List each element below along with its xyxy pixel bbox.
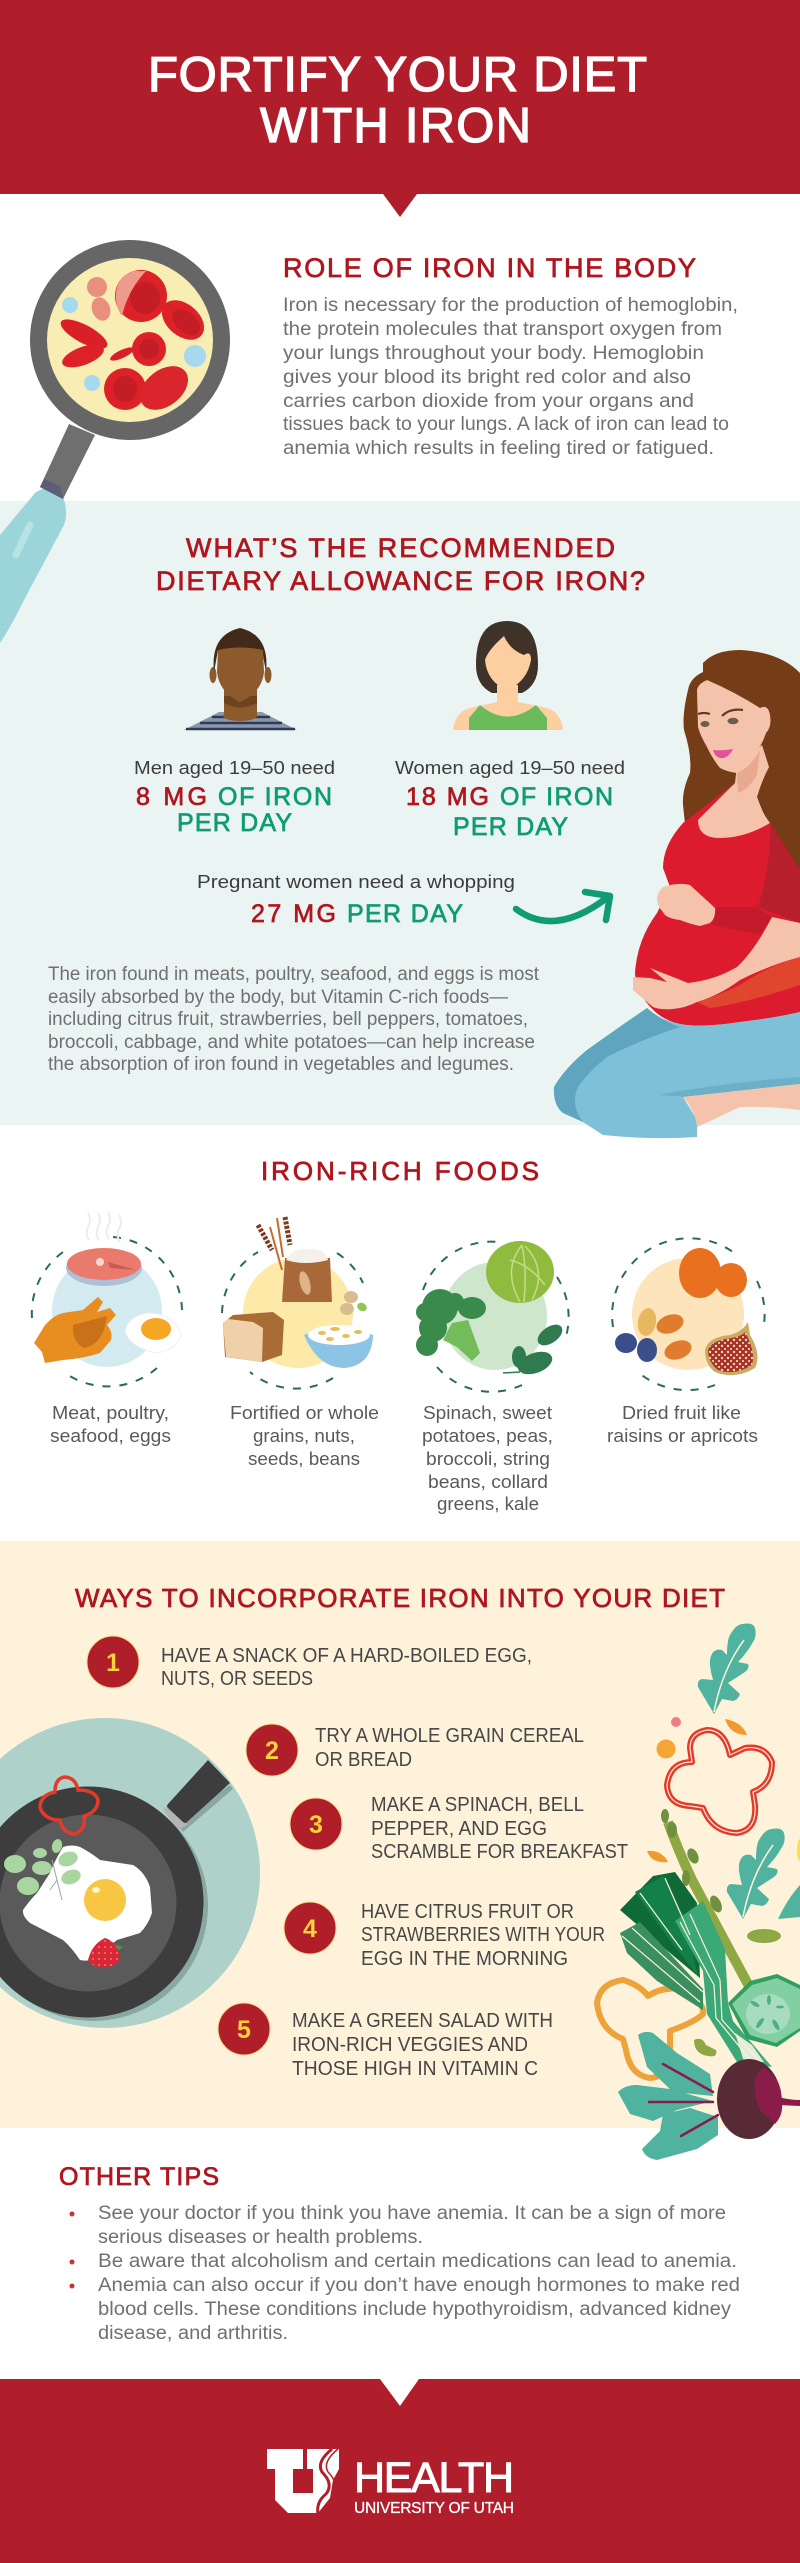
text block: absorption bbox=[48, 964, 540, 1075]
step 5: IRON-RICH VEGGIES AND bbox=[292, 2034, 528, 2056]
text block: men allowance: 8 MG bbox=[136, 783, 207, 811]
text block: men allowance: OF IRON bbox=[218, 783, 332, 811]
text block: role of iron: tissues back to your lungs. A lack of iron can lead to bbox=[283, 414, 729, 435]
red top bbox=[635, 783, 800, 1026]
chard stalks bbox=[620, 1872, 772, 2067]
panel: recommended allowance background bbox=[0, 501, 800, 1125]
icon: grains, nuts, seeds, beans bbox=[222, 1217, 373, 1389]
heading: recommended allowance: DIETARY ALLOWANCE FOR IRON? bbox=[156, 566, 645, 596]
step 3: PEPPER, AND EGG bbox=[371, 1818, 547, 1840]
text: grains label: Fortified or whole bbox=[230, 1402, 379, 1423]
step 4 bbox=[284, 1901, 605, 1970]
text: dried fruit label: Dried fruit like bbox=[622, 1402, 741, 1423]
step 4: 4 bbox=[303, 1915, 317, 1943]
text block: women allowance: 18 MG bbox=[406, 783, 489, 811]
blue cells bbox=[62, 297, 206, 391]
text block: pregnant women allowance bbox=[197, 871, 515, 928]
text: dried fruit label: raisins or apricots bbox=[607, 1425, 758, 1446]
step 1 bbox=[87, 1636, 532, 1690]
text: spinach label: greens, kale bbox=[437, 1493, 539, 1514]
title: FORTIFY YOUR DIET bbox=[148, 48, 647, 102]
text block: role of iron: anemia which results in feeling tired or fatigued. bbox=[283, 438, 714, 459]
list: other tips: Be aware that alcoholism and certain medications can lead to anemia. bbox=[98, 2251, 737, 2272]
yellow pepper bbox=[597, 1980, 703, 2078]
list: other tips: Anemia can also occur if you don’t have enough hormones to make red bbox=[98, 2275, 740, 2296]
text block: pregnant women allowance: 27 MG bbox=[251, 900, 336, 928]
text block: men allowance: Men aged 19–50 need bbox=[134, 757, 335, 778]
sleeve bbox=[758, 823, 800, 923]
heading: recommended allowance bbox=[156, 533, 645, 596]
text: grains label: seeds, beans bbox=[248, 1448, 360, 1469]
foot bbox=[683, 1084, 800, 1127]
text block: men allowance bbox=[134, 757, 335, 837]
text: spinach label: Spinach, sweet bbox=[423, 1402, 552, 1423]
panel: ways to incorporate iron background bbox=[0, 1541, 800, 2128]
step 5: 5 bbox=[237, 2016, 251, 2044]
cucumber bbox=[728, 1974, 800, 2047]
illustration: pan with egg bbox=[0, 1718, 260, 2028]
step 3: MAKE A SPINACH, BELL bbox=[371, 1794, 584, 1816]
text: meat label: seafood, eggs bbox=[50, 1425, 171, 1446]
heading: iron-rich foods: IRON-RICH FOODS bbox=[261, 1156, 539, 1186]
bean bbox=[747, 1929, 781, 1943]
step 3 bbox=[290, 1794, 628, 1863]
neck and chest bbox=[698, 745, 770, 838]
text block: absorption: broccoli, cabbage, and white potatoes—can help increase bbox=[48, 1032, 535, 1053]
step 3: 3 bbox=[309, 1811, 323, 1839]
title bbox=[148, 48, 647, 153]
text block: women allowance bbox=[395, 757, 625, 841]
red blood cells bbox=[57, 270, 212, 419]
asparagus bbox=[661, 1809, 750, 1988]
text: spinach label: broccoli, string bbox=[426, 1448, 550, 1469]
face bbox=[697, 680, 770, 773]
list: other tips: disease, and arthritis. bbox=[98, 2323, 288, 2344]
lower arm and hand bbox=[633, 917, 800, 1009]
step 1: HAVE A SNACK OF A HARD-BOILED EGG, bbox=[161, 1645, 532, 1667]
text: spinach label bbox=[422, 1402, 553, 1514]
text: grains label bbox=[230, 1402, 379, 1469]
text block: women allowance: Women aged 19–50 need bbox=[395, 757, 625, 778]
step 3: SCRAMBLE FOR BREAKFAST bbox=[371, 1841, 628, 1863]
legs bbox=[554, 1008, 800, 1138]
red pepper bbox=[667, 1730, 772, 1833]
text block: pregnant women allowance: PER DAY bbox=[347, 900, 463, 928]
text block: role of iron: the protein molecules that transport oxygen from bbox=[283, 319, 722, 340]
small dots bbox=[647, 1717, 800, 1862]
logo: wordmark: HEALTH bbox=[354, 2454, 514, 2502]
step 4: HAVE CITRUS FRUIT OR bbox=[361, 1901, 574, 1923]
step 1: NUTS, OR SEEDS bbox=[161, 1668, 313, 1690]
title: WITH IRON bbox=[260, 99, 531, 153]
list: other tips bbox=[70, 2203, 740, 2344]
text block: women allowance: PER DAY bbox=[453, 813, 568, 841]
icon: woman bbox=[453, 621, 563, 730]
text block: women allowance: OF IRON bbox=[500, 783, 613, 811]
illustration: vegetables bbox=[597, 1624, 800, 2160]
step 5 bbox=[218, 2003, 553, 2080]
text: spinach label: beans, collard bbox=[428, 1471, 548, 1492]
text: meat label: Meat, poultry, bbox=[52, 1402, 169, 1423]
header banner bbox=[0, 0, 800, 217]
text block: role of iron: gives your blood its bright red color and also bbox=[283, 367, 691, 388]
text block: role of iron bbox=[283, 295, 738, 459]
text block: role of iron: your lungs throughout your body. Hemoglobin bbox=[283, 343, 704, 364]
text block: pregnant women allowance: Pregnant women need a whopping bbox=[197, 871, 515, 892]
text block: absorption: easily absorbed by the body, but Vitamin C-rich foods— bbox=[48, 987, 508, 1008]
heading: ways to incorporate: WAYS TO INCORPORATE IRON INTO YOUR DIET bbox=[75, 1583, 725, 1613]
icon: spinach, broccoli, cabbage bbox=[416, 1241, 569, 1392]
leaf 1 bbox=[698, 1624, 756, 1714]
footer banner bbox=[0, 2379, 800, 2563]
step 2 bbox=[246, 1724, 584, 1776]
hair bbox=[683, 650, 800, 870]
step 2: OR BREAD bbox=[315, 1749, 412, 1771]
chard leaf bbox=[618, 2032, 718, 2160]
text block: absorption: the absorption of iron found in vegetables and legumes. bbox=[48, 1054, 514, 1075]
step 4: EGG IN THE MORNING bbox=[361, 1948, 568, 1970]
arrow bbox=[516, 892, 610, 921]
text block: men allowance: PER DAY bbox=[177, 809, 292, 837]
arm shadow bbox=[697, 957, 800, 1008]
list: other tips: See your doctor if you think you have anemia. It can be a sign of more bbox=[98, 2203, 726, 2224]
step 5: THOSE HIGH IN VITAMIN C bbox=[292, 2058, 538, 2080]
text: dried fruit label bbox=[607, 1402, 758, 1446]
heading: role of iron: ROLE OF IRON IN THE BODY bbox=[283, 253, 696, 283]
icon: meat, poultry, seafood, eggs bbox=[32, 1212, 182, 1386]
text: grains label: grains, nuts, bbox=[253, 1425, 355, 1446]
logo: U mark bbox=[267, 2449, 339, 2514]
illustration: pregnant woman bbox=[554, 650, 800, 1138]
step 4: STRAWBERRIES WITH YOUR bbox=[361, 1924, 605, 1946]
icon: magnifying glass with blood cells bbox=[0, 240, 230, 643]
text block: absorption: including citrus fruit, strawberries, bell peppers, tomatoes, bbox=[48, 1009, 528, 1030]
text: spinach label: potatoes, peas, bbox=[422, 1425, 553, 1446]
text: meat label bbox=[50, 1402, 171, 1446]
heading: recommended allowance: WHAT’S THE RECOMMENDED bbox=[186, 533, 615, 563]
text block: role of iron: carries carbon dioxide from your organs and bbox=[283, 391, 694, 412]
strawberry bbox=[88, 1938, 123, 1967]
text block: absorption: The iron found in meats, poultry, seafood, and eggs is most bbox=[48, 964, 540, 985]
step 5: MAKE A GREEN SALAD WITH bbox=[292, 2010, 553, 2032]
logo: wordmark: UNIVERSITY OF UTAH bbox=[354, 2500, 514, 2517]
leaf 3 bbox=[778, 1885, 800, 1919]
icon: dried fruit bbox=[612, 1238, 765, 1390]
text block: role of iron: Iron is necessary for the production of hemoglobin, bbox=[283, 295, 738, 316]
bean 2 bbox=[694, 2039, 716, 2056]
upper hand bbox=[657, 884, 715, 926]
herbs bbox=[4, 1838, 83, 1900]
step 2: TRY A WHOLE GRAIN CEREAL bbox=[315, 1725, 584, 1747]
step 1: 1 bbox=[106, 1649, 120, 1677]
list: other tips: serious diseases or health problems. bbox=[98, 2227, 423, 2248]
step 2: 2 bbox=[265, 1737, 279, 1765]
beet bbox=[717, 2059, 800, 2139]
leaf 2 bbox=[727, 1828, 785, 1919]
eyes and lips bbox=[698, 710, 743, 758]
heading: other tips: OTHER TIPS bbox=[59, 2163, 219, 2191]
icon: man bbox=[184, 628, 297, 730]
list: other tips: blood cells. These conditions include hypothyroidism, advanced kidney bbox=[98, 2299, 732, 2320]
